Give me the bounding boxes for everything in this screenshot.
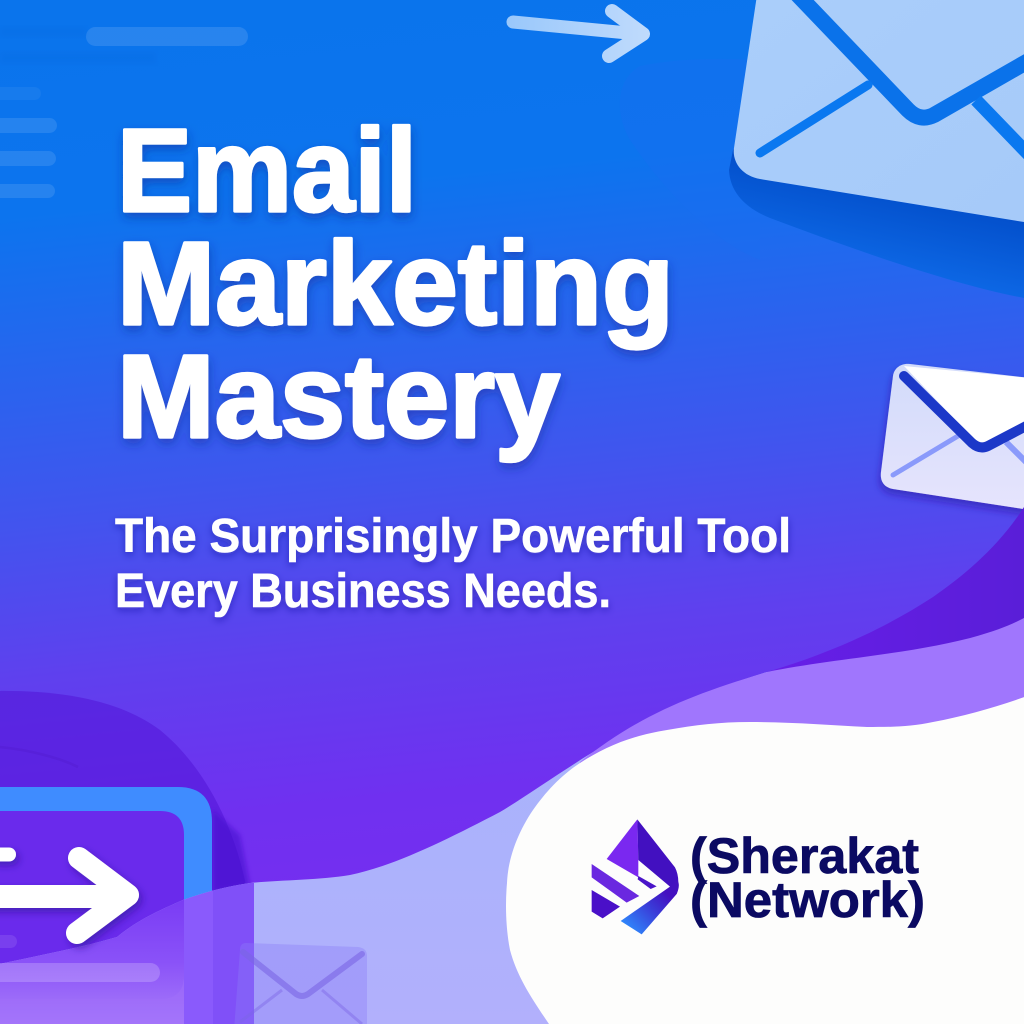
subtitle [115, 510, 791, 618]
dark shade beside card [213, 810, 250, 892]
logo wordmark: (Sherakat [690, 828, 919, 884]
white logo panel [506, 695, 1024, 1024]
title: Email [117, 105, 417, 237]
logo: Sherakat Network [592, 819, 925, 934]
arrow: top right [513, 11, 643, 56]
dark purple wave [700, 507, 1024, 1024]
background blob behind big envelope [620, 59, 760, 260]
logo mark [592, 819, 679, 934]
subtitle: The Surprisingly Powerful Tool [115, 510, 791, 563]
title [117, 105, 674, 463]
title: Marketing [117, 218, 674, 350]
logo wordmark: (Network) [690, 872, 925, 928]
card dim bars [0, 935, 160, 982]
subtitle: Every Business Needs. [115, 565, 611, 618]
faint envelope on wave [234, 943, 367, 1024]
panel: blue framed card [0, 787, 212, 1024]
periwinkle wave [0, 672, 767, 1024]
violet wave [580, 618, 1024, 770]
faint background bars [0, 27, 248, 198]
title: Mastery [117, 331, 560, 463]
dark panel bottom left [0, 691, 254, 1024]
icon: small envelope [881, 364, 1024, 510]
dark swoosh stroke [0, 747, 78, 767]
icon: large envelope [734, 0, 1024, 223]
arrow: card arrow [0, 854, 128, 933]
big envelope shadow [729, 120, 1024, 298]
logo wordmark [690, 828, 925, 928]
wave overlay: card region under wave [0, 880, 254, 1024]
